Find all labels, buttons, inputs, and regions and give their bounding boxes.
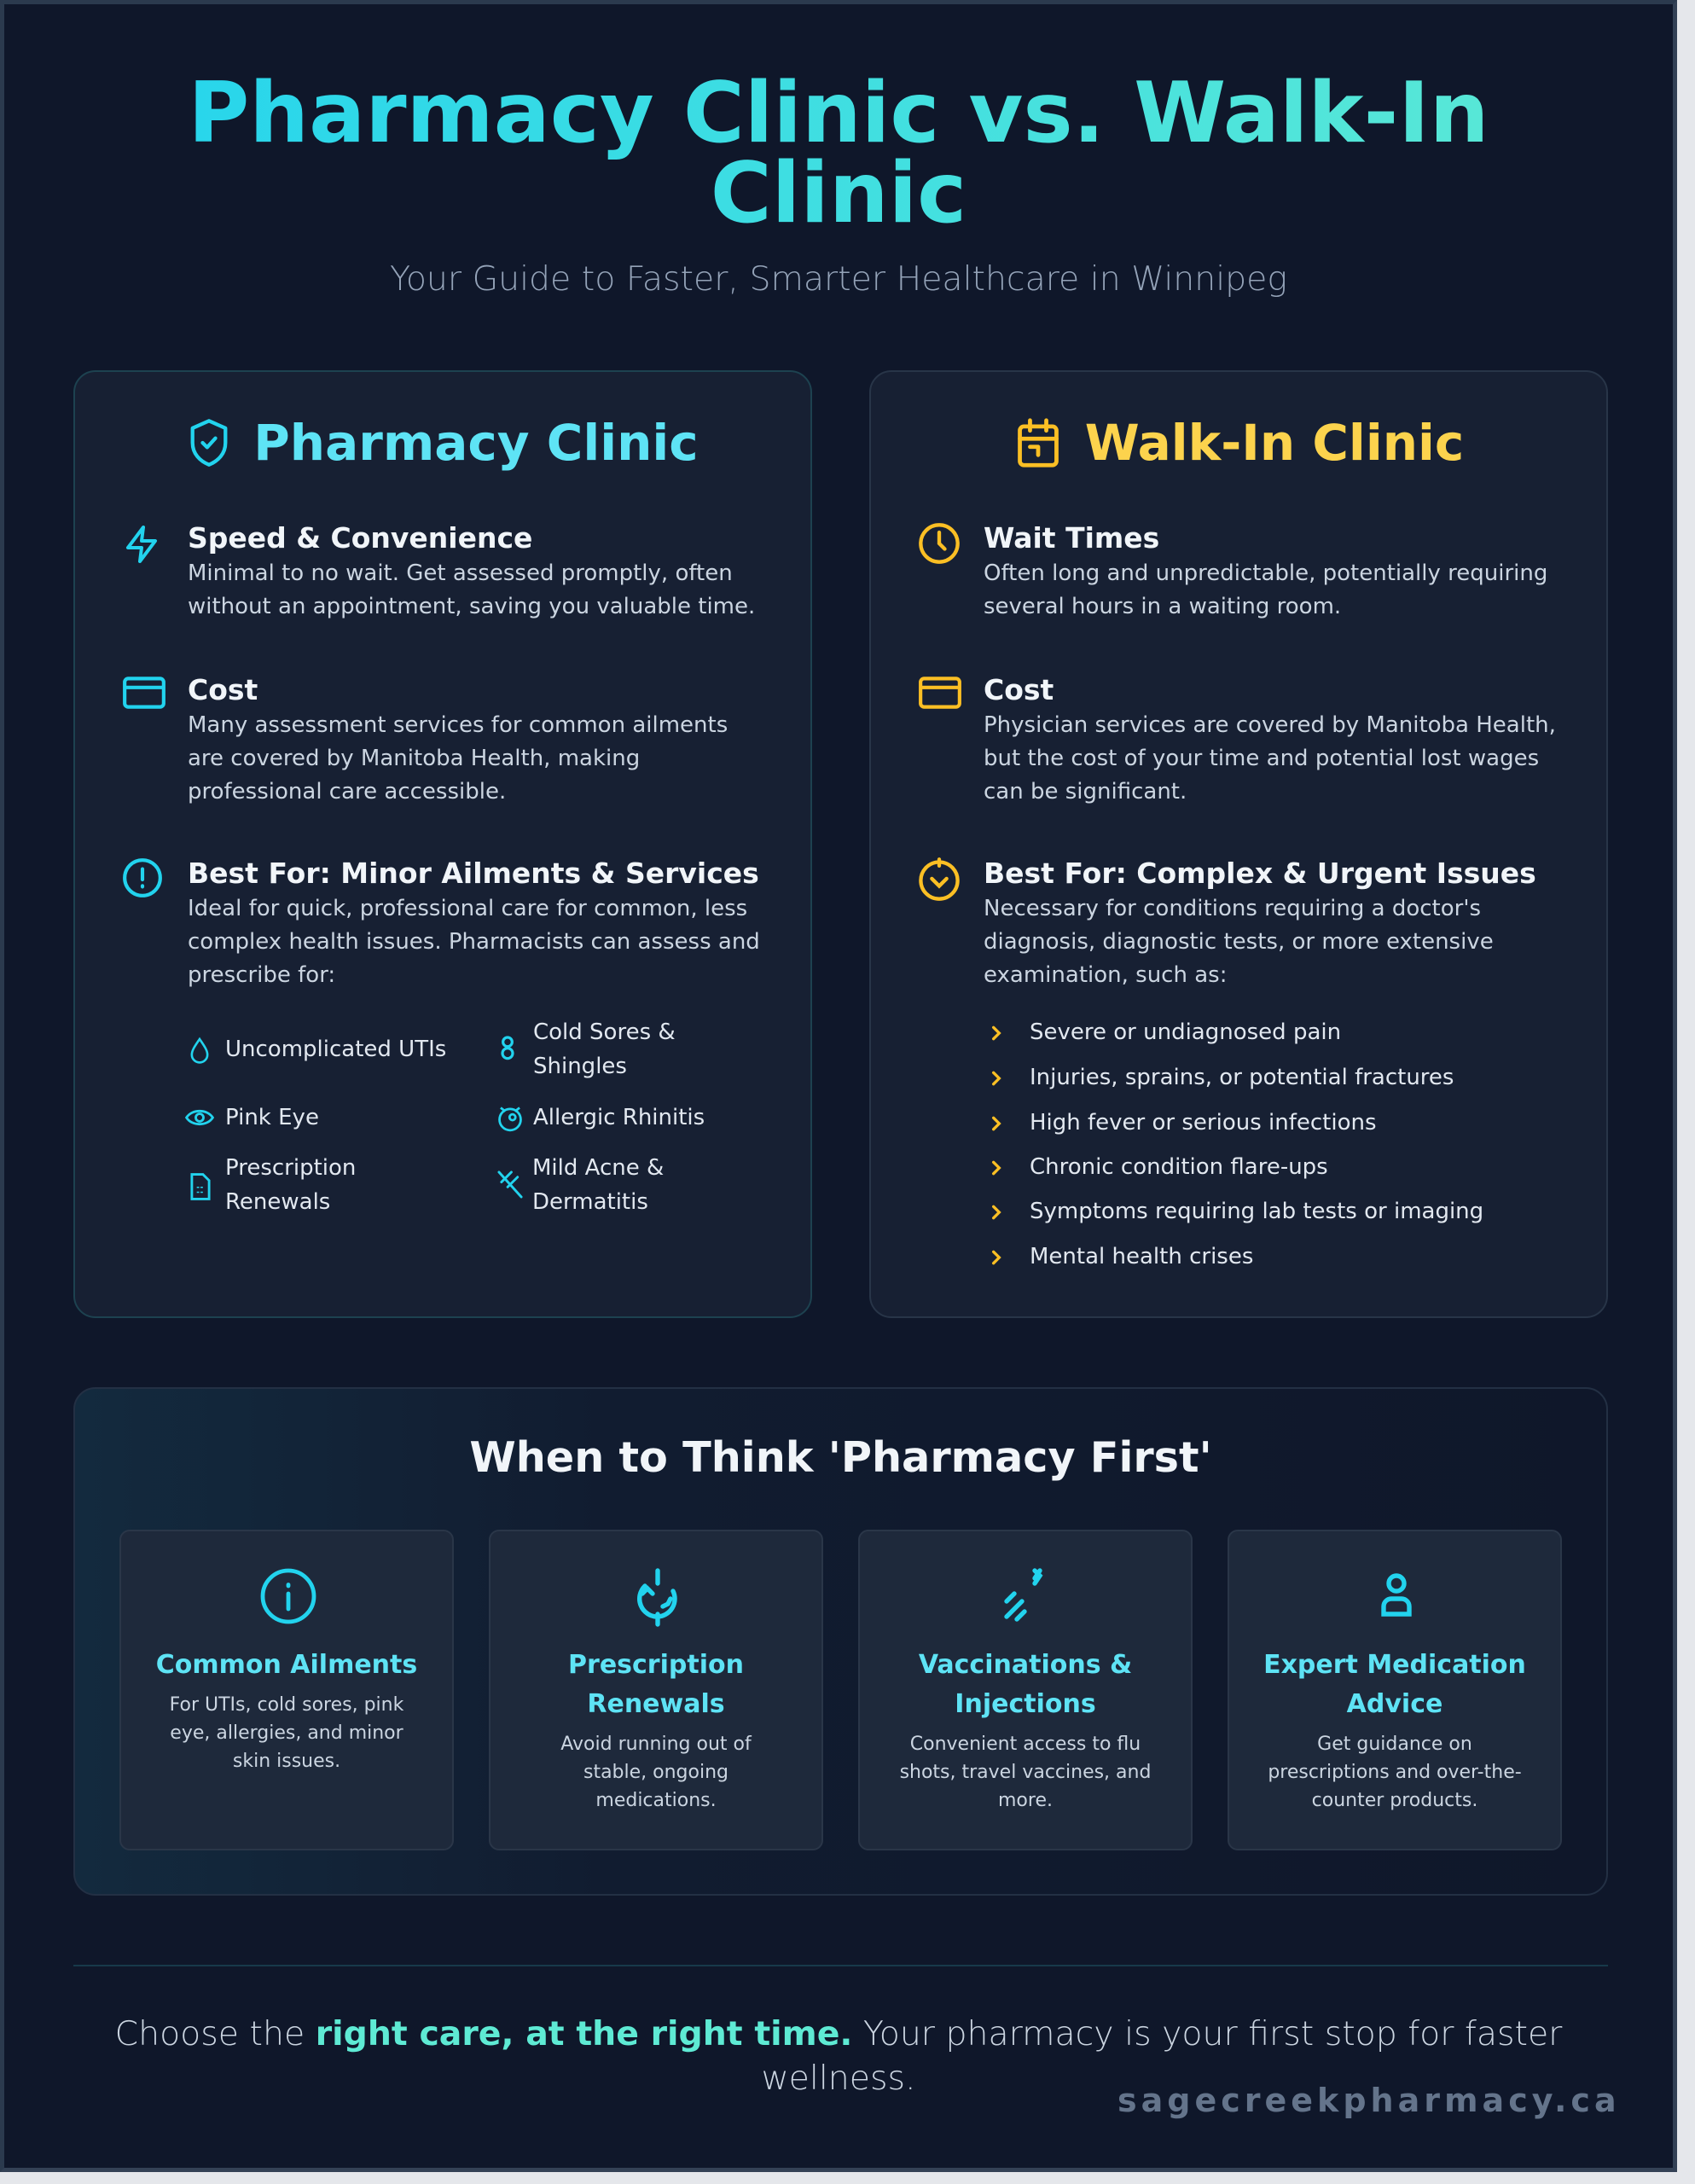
ailment: cold sores: Shingles xyxy=(533,1054,627,1079)
card: prescription renewals: stable, ongoing xyxy=(583,1762,729,1783)
item: best for minor ailments: Ideal for quick, professional care for common, less xyxy=(188,896,747,921)
ailment: cold sores xyxy=(501,1019,676,1079)
card: prescription renewals: Prescription xyxy=(568,1650,744,1680)
footer message xyxy=(115,2014,1563,2098)
item: cost: can be significant. xyxy=(984,779,1187,804)
panel: walk-in clinic xyxy=(869,370,1608,1318)
bullet list: complex issues: Mental health crises xyxy=(1030,1244,1253,1269)
item: best for complex issues: Necessary for conditions requiring a doctor's xyxy=(984,896,1481,921)
bullet list: complex issues xyxy=(991,1019,1483,1269)
card: common ailments xyxy=(119,1530,454,1850)
panel: pharmacy clinic xyxy=(73,370,812,1318)
item: wait times: Often long and unpredictable, potentially requiring xyxy=(984,561,1547,586)
item: best for minor ailments xyxy=(123,857,760,988)
bullet list: complex issues: Injuries, sprains, or potential fractures xyxy=(1030,1065,1454,1090)
item: cost xyxy=(919,673,1556,804)
card: medication advice: Get guidance on xyxy=(1317,1734,1472,1755)
footer message: Choose the right care, at the right time. Your pharmacy is your first stop for faster xyxy=(115,2014,1562,2053)
icon: info xyxy=(261,1568,316,1624)
section heading: When to Think 'Pharmacy First' xyxy=(469,1432,1212,1482)
item: cost: Many assessment services for common ailments xyxy=(188,712,728,738)
card: prescription renewals: Renewals xyxy=(587,1689,725,1719)
ailment: cold sores: Cold Sores & xyxy=(533,1019,676,1045)
item: speed & convenience: Minimal to no wait. Get assessed promptly, often xyxy=(188,561,733,586)
card: vaccinations: Injections xyxy=(955,1689,1096,1719)
bullet list: complex issues: High fever or serious infections xyxy=(1030,1110,1377,1136)
card: medication advice: Advice xyxy=(1347,1689,1442,1719)
item: cost: professional care accessible. xyxy=(188,779,506,804)
card: medication advice: prescriptions and over-the- xyxy=(1268,1762,1522,1783)
item: best for minor ailments: prescribe for: xyxy=(188,962,335,988)
item: wait times: Wait Times xyxy=(984,521,1159,555)
item: speed & convenience: Speed & Convenience xyxy=(188,521,532,555)
item: best for complex issues: Best For: Complex & Urgent Issues xyxy=(984,857,1536,890)
panel heading: pharmacy clinic: Pharmacy Clinic xyxy=(253,414,699,472)
item: best for complex issues: diagnosis, diagnostic tests, or more extensive xyxy=(984,929,1494,955)
card: vaccinations: more. xyxy=(998,1790,1053,1811)
card: medication advice: counter products. xyxy=(1312,1790,1477,1811)
item: speed & convenience: without an appointment, saving you valuable time. xyxy=(188,594,755,619)
card: prescription renewals: medications. xyxy=(595,1790,717,1811)
panel heading: walk-in clinic: Walk-In Clinic xyxy=(1085,414,1464,472)
ailment: prescription renewals: Renewals xyxy=(225,1189,330,1215)
card: medication advice xyxy=(1228,1530,1562,1850)
ailment: prescription renewals: Prescription xyxy=(225,1155,356,1181)
item: wait times xyxy=(919,521,1547,619)
ailment: pink eye: Pink Eye xyxy=(225,1105,319,1130)
card: medication advice: Expert Medication xyxy=(1263,1650,1526,1680)
item: cost: Physician services are covered by Manitoba Health, xyxy=(984,712,1556,738)
item: best for complex issues xyxy=(919,857,1536,988)
ailment: UTIs: Uncomplicated UTIs xyxy=(225,1037,446,1062)
icon: person xyxy=(1381,1573,1412,1617)
item: best for minor ailments: Best For: Minor Ailments & Services xyxy=(188,857,759,890)
item: cost: but the cost of your time and potential lost wages xyxy=(984,746,1539,771)
footer message: wellness. xyxy=(761,2059,916,2098)
subtitle: Your Guide to Faster, Smarter Healthcare in Winnipeg xyxy=(390,259,1287,299)
item: best for minor ailments: complex health issues. Pharmacists can assess and xyxy=(188,929,760,955)
icon: syringe xyxy=(1004,1568,1042,1622)
item: cost xyxy=(123,673,728,804)
section: when to think pharmacy first xyxy=(73,1387,1608,1896)
card: prescription renewals xyxy=(489,1530,823,1850)
title: Pharmacy Clinic vs. Walk-In xyxy=(188,65,1489,162)
card: common ailments: For UTIs, cold sores, pink xyxy=(170,1694,403,1716)
card: common ailments: skin issues. xyxy=(233,1751,340,1772)
card: common ailments: eye, allergies, and minor xyxy=(170,1722,403,1744)
ailment: mild acne: Mild Acne & xyxy=(532,1155,664,1181)
card: prescription renewals: Avoid running out of xyxy=(560,1734,752,1755)
title: Clinic xyxy=(711,145,966,242)
icon: refresh xyxy=(637,1568,677,1627)
ailment: mild acne xyxy=(497,1155,664,1215)
card: common ailments: Common Ailments xyxy=(156,1650,417,1680)
card: vaccinations: Convenient access to flu xyxy=(910,1734,1141,1755)
card: vaccinations: Vaccinations & xyxy=(919,1650,1132,1680)
ailment: prescription renewals xyxy=(190,1155,356,1215)
item: cost: are covered by Manitoba Health, making xyxy=(188,746,640,771)
item: cost: Cost xyxy=(188,673,258,706)
ailment: allergic rhinitis: Allergic Rhinitis xyxy=(533,1105,705,1130)
card: vaccinations: shots, travel vaccines, and xyxy=(900,1762,1151,1783)
bullet list: complex issues: Severe or undiagnosed pain xyxy=(1030,1019,1341,1045)
item: cost: Cost xyxy=(984,673,1054,706)
item: wait times: several hours in a waiting room. xyxy=(984,594,1341,619)
item: best for complex issues: examination, such as: xyxy=(984,962,1227,988)
card: vaccinations xyxy=(858,1530,1193,1850)
website url: sagecreekpharmacy.ca xyxy=(1117,2082,1621,2119)
ailment list grid xyxy=(185,1019,705,1215)
bullet list: complex issues: Symptoms requiring lab tests or imaging xyxy=(1030,1199,1483,1224)
bullet list: complex issues: Chronic condition flare-ups xyxy=(1030,1154,1328,1180)
ailment: mild acne: Dermatitis xyxy=(532,1189,648,1215)
item: speed & convenience xyxy=(126,521,755,619)
title xyxy=(0,73,1677,234)
